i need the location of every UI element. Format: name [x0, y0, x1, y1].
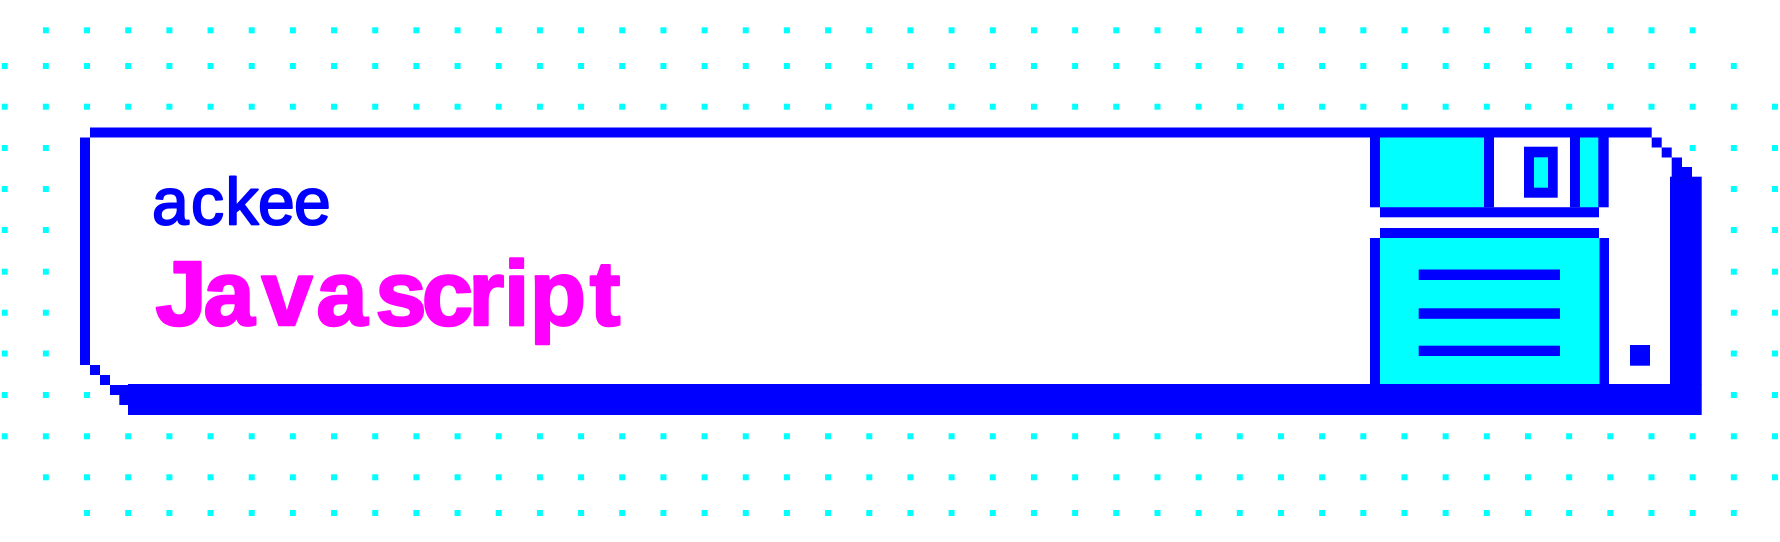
card pixel border [80, 128, 1702, 415]
floppy shutter [1370, 138, 1609, 217]
card background [80, 128, 1702, 415]
title: Javascript [156, 243, 620, 345]
panel: pixel window card [80, 128, 1702, 415]
floppy label [1370, 228, 1609, 384]
floppy corner notch [1630, 345, 1650, 366]
icon: floppy disk [1370, 138, 1650, 384]
brand name: ackee [152, 164, 331, 238]
